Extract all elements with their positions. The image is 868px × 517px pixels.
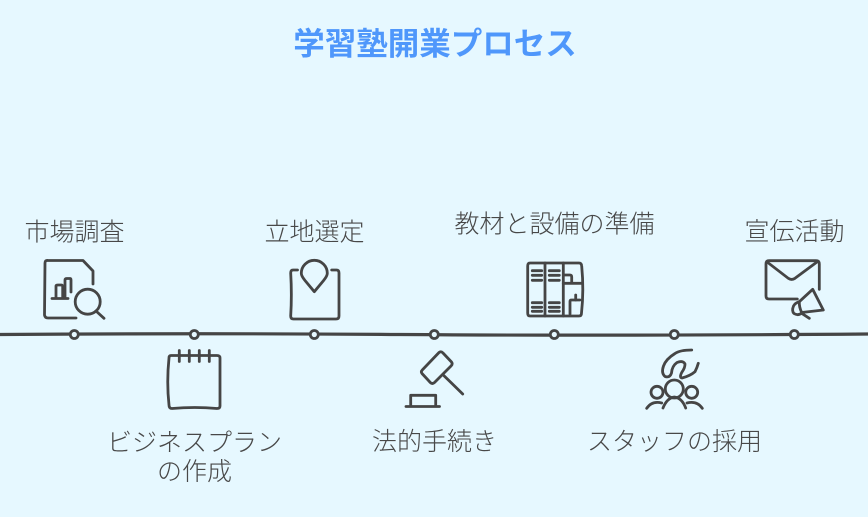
label: materials and equipment: 教材と設備の準備 [454, 210, 655, 238]
icon: envelope with megaphone [766, 261, 823, 318]
title: 学習塾開業プロセス [293, 26, 577, 62]
icon: gavel [406, 352, 463, 406]
timeline [0, 330, 868, 338]
label: legal procedures: 法的手続き [372, 428, 497, 456]
icon: bookshelf [528, 263, 583, 316]
icon: notepad [168, 350, 220, 408]
label: business plan: ビジネスプラン [107, 429, 282, 457]
label: advertising: 宣伝活動 [744, 218, 845, 246]
icon: hand over people [647, 350, 702, 408]
icon: document with chart and magnifier [44, 260, 104, 318]
label: market research: 市場調査 [24, 218, 125, 246]
label: site selection: 立地選定 [264, 218, 365, 246]
label: business plan: の作成 [157, 458, 232, 486]
label: staff recruitment: スタッフの採用 [587, 428, 762, 456]
icon: location pin on map [291, 260, 339, 319]
